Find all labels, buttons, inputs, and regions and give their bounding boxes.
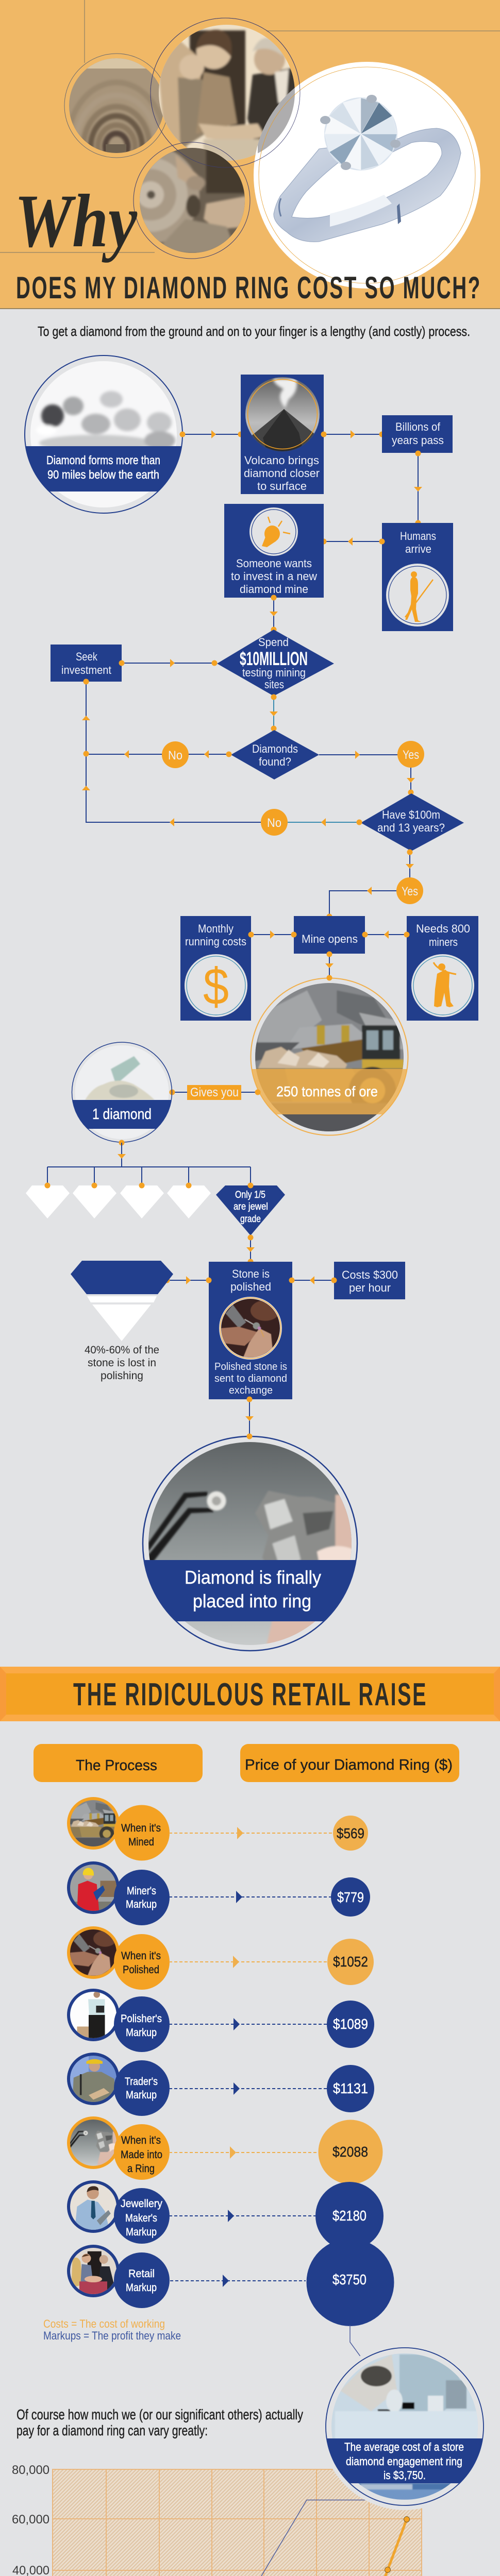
label: diamond closer — [244, 467, 320, 480]
label: 90 miles below the earth — [47, 468, 159, 481]
photo: polishing wheel — [133, 142, 251, 259]
box: costs 300 per hour: Costs $300 — [342, 1268, 398, 1281]
icon: light bulb — [262, 517, 290, 547]
axis labels — [12, 2463, 420, 2576]
box: someone wants to invest — [224, 504, 324, 598]
box: billions of years — [382, 415, 453, 453]
decision: diamonds found: found? — [259, 755, 291, 768]
box: billions of years: Billions of — [395, 420, 441, 433]
box: needs 800 miners: Needs 800 — [416, 922, 470, 935]
legend — [43, 2317, 181, 2342]
row: polished 1052 — [67, 1926, 374, 1990]
branch: yes: Yes — [403, 748, 419, 762]
row: miner markup 779: Miner's — [127, 1885, 156, 1897]
panel: average store cost: diamond engagement ring — [346, 2455, 462, 2468]
row: trader markup 1131: Trader's — [125, 2076, 158, 2088]
gem: only one fifth jewel grade: grade — [240, 1214, 261, 1225]
arrows: boxes to mine opens — [248, 930, 409, 939]
panel: 250 tonnes of ore: 250 tonnes of ore — [276, 1083, 378, 1099]
row: trader markup 1131: $1131 — [333, 2080, 368, 2096]
arrow: mine to ore — [325, 951, 334, 978]
box: someone wants to invest: diamond mine — [240, 583, 308, 596]
icon: miner — [434, 962, 456, 1007]
box: stone is polished: exchange — [229, 1385, 273, 1396]
row: when mined 569: When it's — [121, 1822, 161, 1834]
box: needs 800 miners — [407, 916, 478, 1021]
row: miner markup 779: Markup — [126, 1899, 157, 1910]
decision: have 100m and 13 years — [361, 793, 464, 851]
arrow: to polishing — [246, 1234, 255, 1264]
row: miner markup 779: $779 — [337, 1889, 364, 1905]
chart intro text: pay for a diamond ring can vary greatly: — [16, 2422, 208, 2438]
icon: dollar: $ — [203, 958, 229, 1015]
row: polished 1052: Polished — [123, 1964, 159, 1976]
row: made into ring 2088: a Ring — [127, 2163, 155, 2175]
tree: five stones branch — [47, 1143, 251, 1185]
panel: average store cost — [321, 2343, 488, 2510]
row: made into ring 2088: $2088 — [332, 2144, 368, 2160]
box: seek investment: Seek — [76, 650, 98, 663]
row: jewellery maker markup 2180: Jewellery — [121, 2198, 162, 2210]
gem: stone lost in polishing — [71, 1261, 173, 1382]
branch: yes to mine opens — [327, 849, 423, 919]
box: humans arrive: Humans — [400, 530, 436, 543]
column header: price of ring: Price of your Diamond Ring ($) — [245, 1757, 453, 1773]
box: stone is polished — [209, 1262, 292, 1399]
panel: diamond placed into ring: Diamond is finally — [185, 1567, 321, 1588]
label — [46, 453, 160, 481]
row: jewellery maker markup 2180: Maker's — [125, 2212, 157, 2224]
box: needs 800 miners: miners — [429, 936, 458, 948]
gem: stone lost in polishing: stone is lost in — [88, 1357, 156, 1369]
line chart: price by carat — [12, 2463, 422, 2576]
decision: have 100m and 13 years: Have $100m — [382, 808, 440, 821]
row: trader markup 1131: Markup — [126, 2089, 157, 2101]
panel: 1 diamond — [70, 1042, 175, 1146]
arrow: to testing — [270, 595, 278, 633]
row: polisher markup 1089: Polisher's — [121, 2013, 162, 2025]
arrow: to billions — [321, 430, 385, 438]
decision: diamonds found: Diamonds — [252, 742, 298, 755]
gem: stone lost in polishing: 40%-60% of the — [85, 1344, 159, 1356]
row: jewellery maker markup 2180: Markup — [126, 2226, 157, 2238]
panel: average store cost: The average cost of a store — [344, 2441, 464, 2453]
row: when mined 569: Mined — [128, 1836, 154, 1848]
branch: no from funding: No — [267, 816, 281, 830]
photo: diamond mine pit — [64, 54, 166, 158]
box: stone is polished: Stone is — [232, 1267, 270, 1280]
gem: stone lost in polishing: polishing — [101, 1370, 143, 1382]
label: to surface — [257, 480, 307, 493]
label: Volcano brings — [244, 454, 319, 467]
box: billions of years: years pass — [392, 434, 444, 447]
axis labels: 80,000 — [12, 2463, 49, 2477]
icon: diamond engagement ring — [274, 95, 461, 242]
callout connector: to store circle — [350, 2325, 362, 2359]
arrow: to investor — [321, 537, 385, 546]
arrow: seek to spend — [119, 659, 218, 667]
panel: 1 diamond: 1 diamond — [92, 1106, 152, 1123]
arrow: to ring — [245, 1396, 254, 1436]
hero header panel — [0, 0, 500, 309]
box: stone is polished: Polished stone is — [214, 1361, 287, 1372]
decision: spend 10 million: testing mining — [242, 666, 306, 679]
row: jewellery maker markup 2180 — [67, 2180, 384, 2250]
decision: diamonds found — [231, 730, 319, 779]
panel: diamond placed into ring: placed into ring — [193, 1590, 311, 1612]
chart intro text: Of course how much we (or our significant others) actually — [16, 2406, 303, 2422]
box: monthly running costs: running costs — [185, 935, 246, 948]
box: humans arrive: arrive — [405, 543, 431, 555]
white ring disc — [254, 62, 480, 289]
panel: diamond placed into ring — [139, 1433, 362, 1655]
row: made into ring 2088: When it's — [121, 2134, 161, 2146]
arrow: spend to diamonds found — [270, 694, 278, 732]
title word: Why: Why — [14, 179, 138, 263]
row: polisher markup 1089: Markup — [126, 2027, 157, 2039]
branch: no, back to investment — [82, 679, 274, 826]
panel: average store cost: is $3,750. — [384, 2469, 426, 2482]
label — [244, 454, 320, 493]
box: mine opens — [294, 916, 365, 954]
box: stone is polished: polished — [230, 1280, 271, 1293]
gem: only one fifth jewel grade: Only 1/5 — [235, 1190, 265, 1200]
panel: diamond forms — [21, 355, 186, 513]
row: jewellery maker markup 2180: $2180 — [332, 2208, 366, 2224]
column header: the process: The Process — [76, 1757, 157, 1774]
row: polisher markup 1089: $1089 — [333, 2016, 368, 2032]
panel: 250 tonnes of ore — [247, 975, 412, 1136]
legend: Markups = The profit they make — [43, 2329, 181, 2342]
row: polished 1052: $1052 — [333, 1954, 368, 1970]
branch: no, back to investment: No — [168, 749, 182, 762]
box: someone wants to invest: Someone wants — [236, 557, 312, 570]
section: hero and diamond journey flowchart — [0, 0, 500, 1782]
icon: human — [405, 571, 433, 622]
photo: couple buying ring — [151, 18, 300, 167]
decision: spend 10 million: sites — [264, 678, 284, 691]
box: seek investment — [51, 645, 122, 682]
row: when mined 569 — [67, 1797, 368, 1861]
decision: spend 10 million: $10MILLION — [240, 648, 308, 669]
column header: price of ring — [240, 1744, 459, 1782]
axis labels: 60,000 — [12, 2513, 49, 2527]
row: retail markup 3750: $3750 — [332, 2272, 366, 2287]
box: humans arrive — [382, 523, 453, 631]
decision: have 100m and 13 years: and 13 years? — [377, 821, 445, 834]
panel: volcano — [241, 375, 325, 494]
column header: the process — [34, 1744, 203, 1782]
legend: Costs = The cost of working — [43, 2317, 165, 2330]
section banner: retail raise — [0, 1667, 500, 1721]
overlap tint — [258, 88, 295, 154]
row: polisher markup 1089 — [67, 1989, 374, 2052]
gems: four white stones — [26, 1183, 211, 1218]
decision: spend 10 million: Spend — [258, 636, 289, 649]
chart intro text — [16, 2406, 303, 2438]
row: retail markup 3750: Markup — [126, 2282, 157, 2294]
row: made into ring 2088 — [67, 2116, 382, 2184]
row: trader markup 1131 — [67, 2053, 374, 2116]
branch: no from funding — [261, 809, 362, 836]
section: price rows, chart and store callout — [12, 1797, 484, 2576]
curve — [64, 2516, 409, 2576]
row: made into ring 2088: Made into — [121, 2149, 162, 2161]
box: someone wants to invest: to invest in a new — [231, 570, 317, 583]
connector: gives you — [169, 1085, 261, 1100]
box: seek investment: investment — [61, 664, 111, 676]
arrow: to humans — [414, 450, 422, 526]
box: costs 300 per hour: per hour — [349, 1281, 391, 1294]
row: when mined 569: $569 — [337, 1825, 364, 1841]
arrows: polishing connectors — [164, 1276, 337, 1284]
box: monthly running costs: Monthly — [198, 922, 234, 935]
row: retail markup 3750 — [67, 2239, 394, 2326]
gem: only one fifth jewel grade: are jewel — [234, 1201, 268, 1212]
row: miner markup 779 — [67, 1861, 370, 1925]
row: retail markup 3750: Retail — [128, 2268, 155, 2280]
box: costs 300 per hour — [334, 1262, 405, 1299]
box: stone is polished: sent to diamond — [214, 1373, 287, 1384]
connector: gives you: Gives you — [190, 1086, 239, 1099]
row: polished 1052: When it's — [121, 1950, 161, 1962]
branch: yes — [319, 741, 424, 795]
label: Diamond forms more than — [46, 453, 160, 467]
branch: yes to mine opens: Yes — [402, 885, 418, 899]
gem: only one fifth jewel grade — [216, 1183, 285, 1235]
arrow: to volcano — [179, 430, 243, 438]
box: monthly running costs — [180, 916, 251, 1021]
decision: spend 10 million — [217, 630, 334, 696]
box: mine opens: Mine opens — [302, 933, 358, 945]
